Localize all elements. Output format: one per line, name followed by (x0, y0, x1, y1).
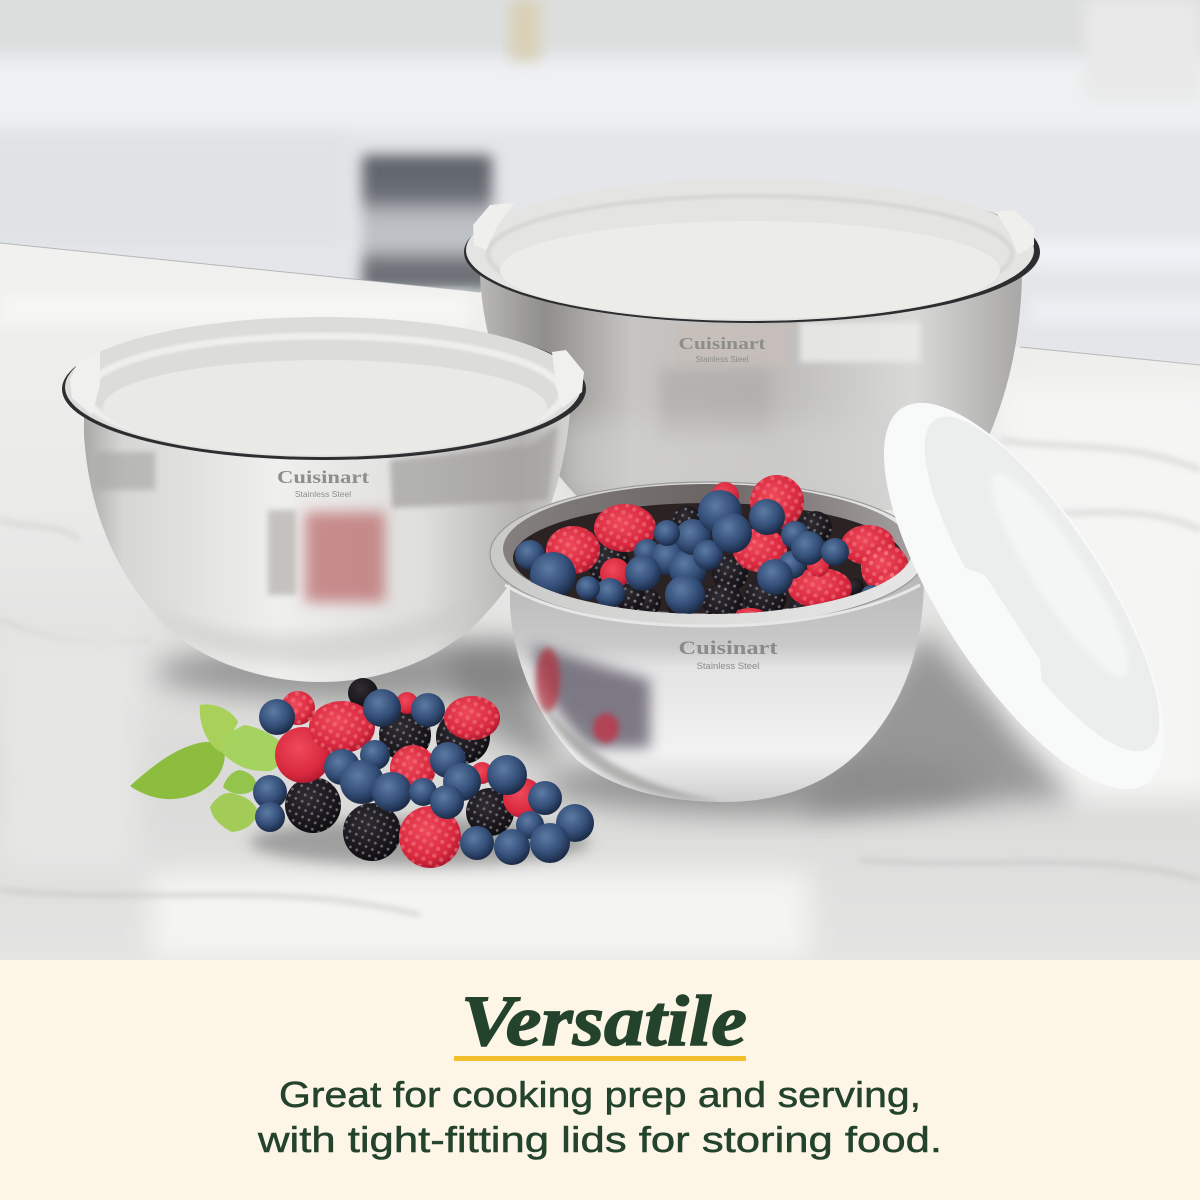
bowl body (510, 572, 924, 802)
rim (62, 318, 586, 460)
logo (678, 638, 778, 672)
lid grooves (488, 196, 1012, 312)
logo: Stainless Steel (696, 355, 749, 364)
lid centre (103, 360, 547, 454)
large back bowl (464, 179, 1040, 510)
lid tabs (473, 203, 1034, 255)
mint leaves (130, 704, 287, 832)
description line 2: with tight-fitting lids for storing food. (257, 1119, 942, 1160)
loose berries and mint (130, 678, 594, 868)
caption panel (0, 960, 1200, 1200)
lid highlight (973, 460, 1147, 690)
bowl interior (503, 484, 913, 614)
interior shadow (513, 503, 903, 613)
bowl body (84, 413, 570, 682)
marble counter (0, 243, 1200, 960)
lid tabs (70, 350, 584, 415)
heading: Versatile (461, 981, 747, 1061)
bowl reflections (560, 322, 920, 500)
bowl body (480, 275, 1022, 510)
inner lid panel (887, 388, 1197, 780)
heading underline (454, 1056, 746, 1061)
logo (277, 467, 369, 499)
lid (65, 317, 581, 457)
logo: Cuisinart (277, 467, 369, 487)
notched lid flange (965, 568, 1042, 685)
outer lid rim (833, 363, 1200, 829)
blueberries (253, 689, 594, 865)
logo: Cuisinart (678, 334, 766, 353)
bowl reflections (532, 645, 725, 802)
bowl reflections (95, 425, 558, 664)
lid (466, 179, 1034, 321)
raspberries (275, 691, 543, 868)
rim (490, 482, 926, 626)
logo (678, 334, 766, 364)
shadows under bowls (155, 630, 1075, 866)
logo: Stainless Steel (295, 489, 351, 499)
front rim highlight (505, 585, 920, 626)
small front bowl (490, 475, 926, 802)
logo: Stainless Steel (697, 661, 759, 672)
blackberries (285, 678, 514, 861)
lid centre (500, 221, 1000, 319)
blurred kitchen background (0, 0, 1200, 380)
description line 1: Great for cooking prep and serving, (279, 1074, 921, 1115)
detached clear lid (833, 363, 1200, 829)
lid grooves (86, 336, 562, 452)
logo: Cuisinart (678, 638, 778, 659)
berries in bowl (515, 475, 917, 622)
left bowl (62, 317, 586, 682)
rim (464, 181, 1040, 323)
